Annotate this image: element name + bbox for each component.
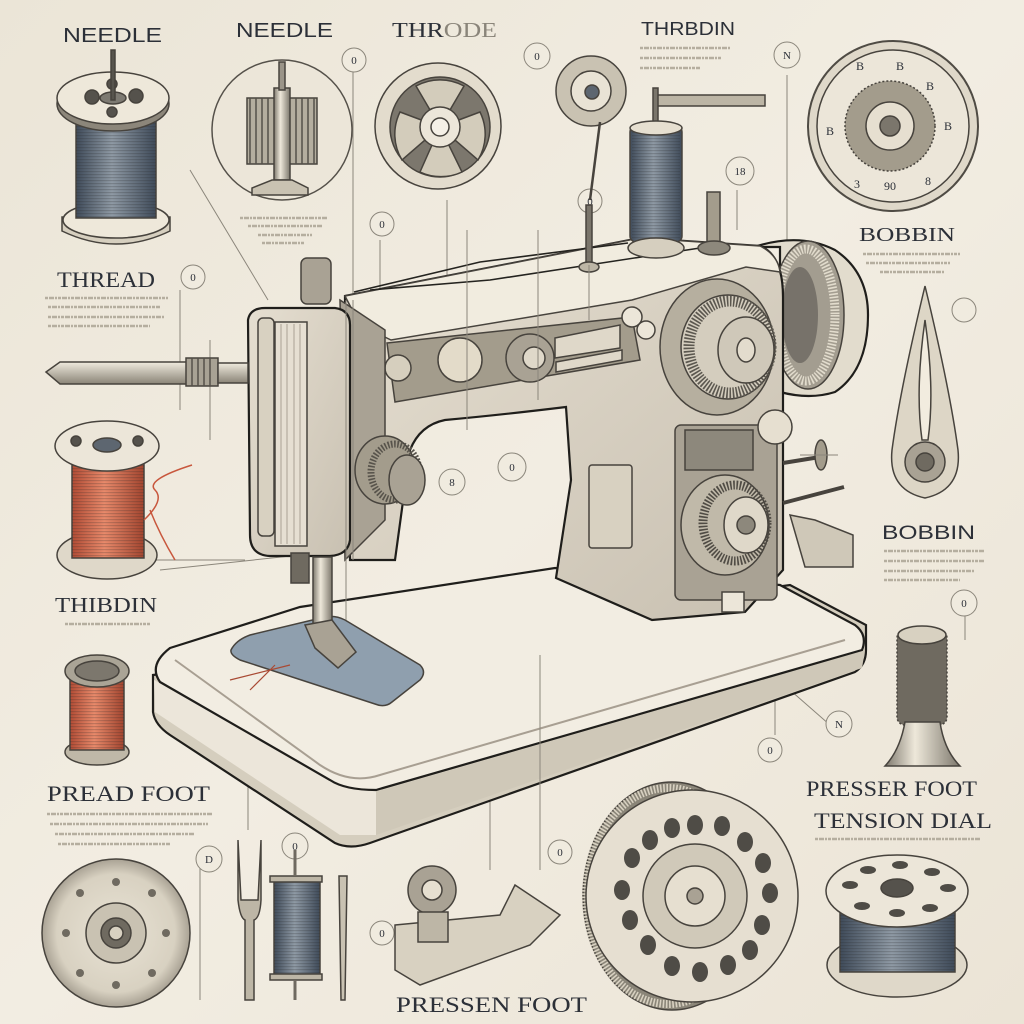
number markers: 0 [379, 219, 385, 231]
icon: seam ripper [892, 286, 958, 498]
icon: dial top right: B [944, 119, 952, 133]
number markers [181, 42, 977, 945]
label: thrbdin: THRBDIN [641, 19, 735, 39]
label: thread top: THR ODE [392, 18, 497, 42]
icon: grey spool top left [57, 50, 170, 244]
knob on head [355, 436, 425, 505]
label: tension dial: TENSION DIAL [814, 808, 992, 833]
icon: dial top right: B [826, 124, 834, 138]
label: bobbin 2: BOBBIN [882, 523, 975, 544]
number markers: 18 [734, 166, 746, 178]
icon: dial top right: 8 [925, 174, 931, 188]
machine base [153, 568, 866, 846]
column panel [589, 465, 632, 548]
label: pread foot: PREAD FOOT [47, 781, 211, 806]
thread lines [354, 243, 700, 292]
label: pressen foot: PRESSEN FOOT [396, 992, 588, 1017]
number markers: 0 [351, 55, 357, 67]
icon: handwheel [754, 240, 868, 396]
right side levers [783, 440, 853, 567]
number markers: N [835, 719, 843, 731]
icon: dial top right: B [856, 59, 864, 73]
number markers: 0 [961, 598, 967, 610]
number markers: 0 [379, 928, 385, 940]
sewing machine [153, 88, 866, 846]
leader lines [130, 70, 965, 1000]
label: needle 2: NEEDLE [236, 20, 333, 42]
number markers: N [783, 50, 791, 62]
icon: small thread wheel [556, 56, 765, 200]
icon: tension post [885, 626, 960, 766]
label: bobbin 1: BOBBIN [859, 224, 955, 246]
number markers: 0 [190, 272, 196, 284]
stitch plate [231, 616, 424, 706]
spool on top of machine [628, 88, 684, 258]
label: needle 1: NEEDLE [63, 25, 162, 47]
number markers: 0 [587, 196, 593, 208]
thread guide [579, 205, 599, 272]
head mechanics side [340, 300, 385, 560]
icon: horizontal rod [46, 358, 248, 386]
number markers: D [205, 854, 213, 866]
icon: needle in circle [212, 60, 352, 200]
icon: dial top right: 3 [854, 177, 860, 191]
number markers: 0 [557, 847, 563, 859]
needle bar and presser foot [291, 553, 356, 668]
label: presser foot: PRESSER FOOT [806, 776, 978, 801]
label: thread: THREAD [57, 267, 155, 292]
icon: presser foot [395, 866, 560, 985]
icon: wheel [375, 63, 501, 189]
icon: dial top right: B [896, 59, 904, 73]
icon: small orange spool [65, 655, 129, 765]
number markers: 0 [534, 51, 540, 63]
icon: fork and small spool [238, 840, 347, 1000]
red thread [230, 665, 290, 690]
icon: bottom left dial [42, 859, 190, 1007]
number markers: 8 [449, 477, 455, 489]
lower mechanism window [675, 410, 792, 612]
icon: dial top right: 90 [884, 179, 896, 193]
mechanism window [385, 307, 655, 402]
over-machine leader lines [346, 230, 838, 790]
caption scribbles [45, 48, 985, 844]
knob recess and tension knob [660, 279, 775, 415]
icon: large perforated wheel [583, 782, 798, 1010]
icon: red spool [55, 421, 192, 579]
icon: dial top right [808, 41, 978, 211]
number markers: 0 [767, 745, 773, 757]
icon: dial top right: B [926, 79, 934, 93]
spool pin [698, 192, 730, 255]
machine body [345, 238, 783, 620]
number markers: 0 [292, 841, 298, 853]
label: thibdin: THIBDIN [55, 593, 157, 617]
head [248, 258, 350, 556]
number markers: 0 [509, 462, 515, 474]
icon: bottom right bobbin [826, 855, 968, 997]
